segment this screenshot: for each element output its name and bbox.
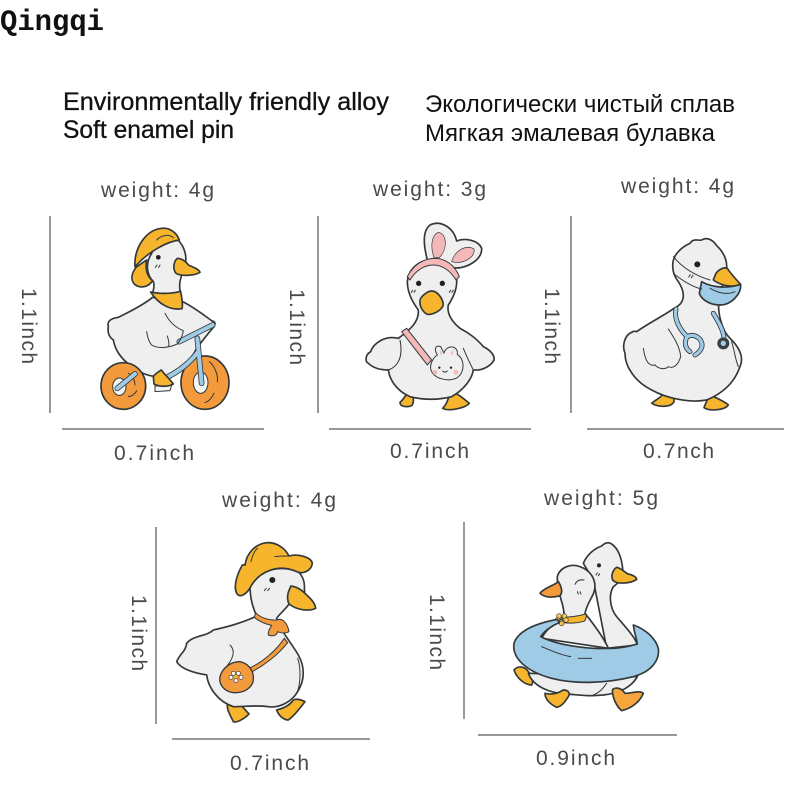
pin: duck with face mask and stethoscope [624,239,742,410]
height dimension: cycling duck: 1.1inch [17,288,40,364]
width dimension: cycling duck: 0.7inch [114,442,194,465]
width dimension: doctor duck: 0.7nch [643,440,714,463]
weight label: hat duck: weight: 4g [221,489,336,512]
weight label: doctor duck: weight: 4g [620,175,734,198]
height dimension: bunny duck: 1.1inch [285,289,308,365]
weight label: swim ring ducks: weight: 5g [543,487,658,510]
english description: Soft enamel pin [63,116,234,144]
stethoscope [675,309,724,355]
weight label: cycling duck: weight: 4g [100,179,214,202]
brand name: Qingqi [0,6,104,40]
width dimension: bunny duck: 0.7inch [390,440,469,463]
russian description [425,91,735,147]
russian description: Мягкая эмалевая булавка [425,120,716,147]
height dimension: doctor duck: 1.1inch [540,288,563,364]
width dimension: hat duck: 0.7inch [230,752,309,775]
russian description: Экологически чистый сплав [425,91,735,118]
height dimension: swim ring ducks: 1.1inch [425,594,448,670]
height dimension: hat duck: 1.1inch [127,595,150,671]
pin: two ducks in swim ring [514,543,659,711]
pin: duck with yellow hat and satchel [177,543,316,722]
weight label: bunny duck: weight: 3g [372,178,486,201]
bicycle frame [117,325,213,388]
english description: Environmentally friendly alloy [63,88,389,116]
width dimension: swim ring ducks: 0.9inch [536,747,615,770]
pin: duck with bunny ears [366,223,494,410]
pin: duck on bicycle with cap [101,228,229,409]
english description [63,88,389,144]
